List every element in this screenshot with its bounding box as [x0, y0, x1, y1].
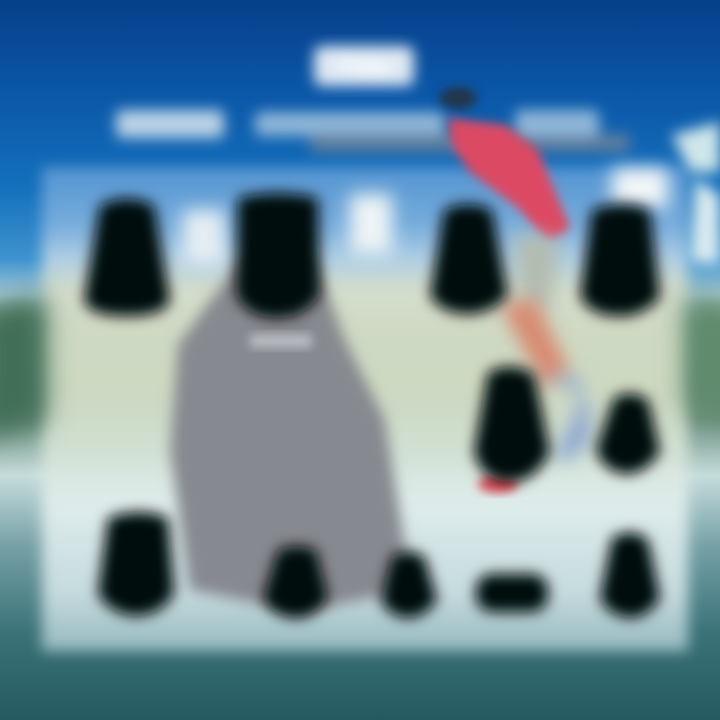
- icon: top 1: [84, 198, 170, 316]
- figure shorts: [515, 232, 560, 312]
- subtitle: [116, 110, 630, 152]
- panel: central grey column: [170, 260, 412, 612]
- icon: bottom 2: [263, 546, 328, 618]
- title: Title: [338, 52, 390, 82]
- title: [314, 46, 414, 86]
- figure red accent: [478, 475, 518, 493]
- icon: bottom 3: [381, 552, 437, 618]
- figure legs: [500, 298, 570, 388]
- corner graphic: top right: [672, 122, 720, 265]
- figure shoes: [545, 372, 592, 465]
- icon: mid 1: [474, 366, 550, 482]
- figure: person: [439, 87, 592, 493]
- green edge hills: [0, 295, 720, 440]
- central column label: [250, 334, 312, 348]
- icons: dark blobs: [84, 193, 660, 618]
- icon: bottom 5: [600, 532, 660, 618]
- icon: top 2: [236, 193, 320, 318]
- icon: top 3: [430, 204, 508, 314]
- icon: bottom 4: [476, 574, 548, 612]
- sky highlights: [183, 168, 668, 264]
- icon: mid 2: [596, 393, 660, 474]
- icon: bottom 1: [98, 512, 174, 616]
- figure shirt: [448, 118, 570, 242]
- figure head: [439, 87, 477, 109]
- panel: main card: [42, 167, 688, 651]
- icon: top 4: [580, 204, 660, 316]
